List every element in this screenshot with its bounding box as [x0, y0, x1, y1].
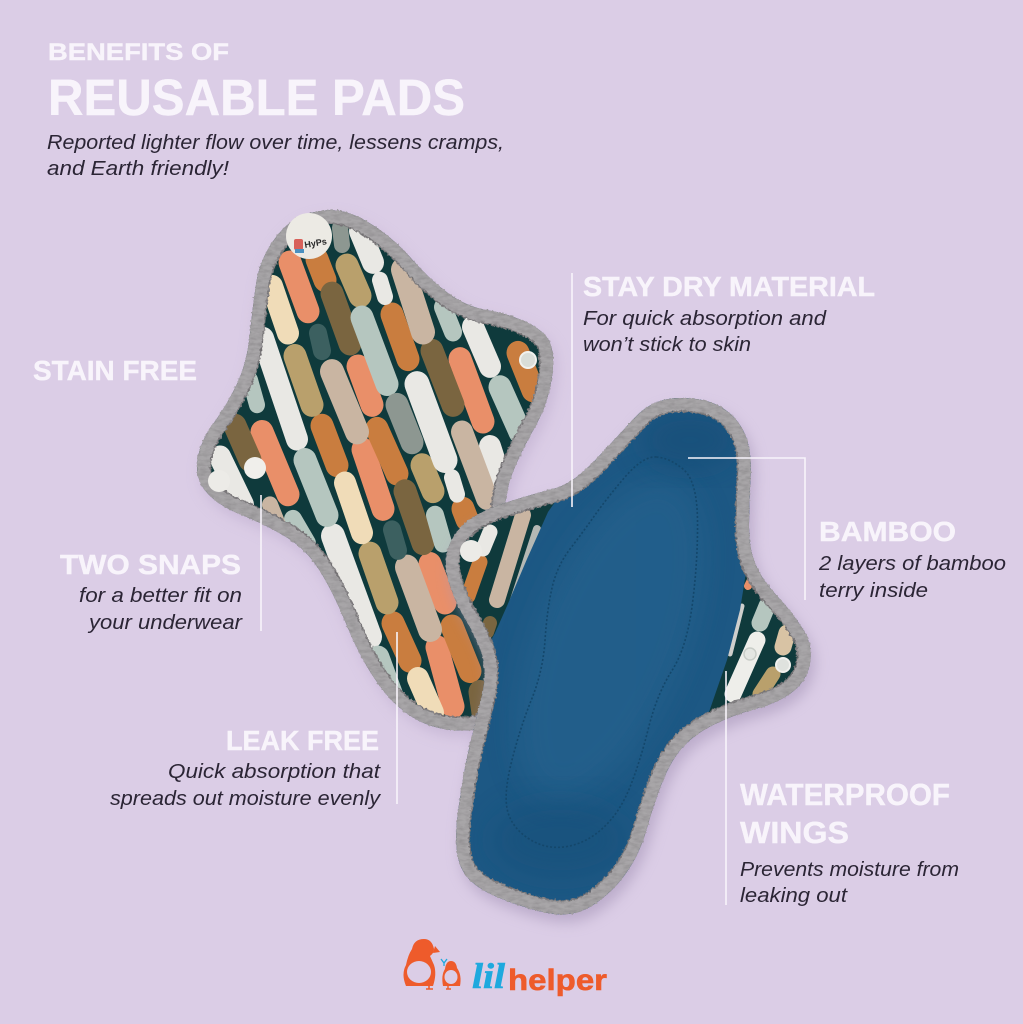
blue fabric	[456, 398, 751, 914]
callout: leak free: spreads out moisture evenly	[110, 788, 381, 810]
callout: bamboo	[688, 458, 1006, 602]
wing print stripes	[468, 515, 787, 694]
callout: leak free: LEAK FREE	[226, 725, 379, 756]
HyPs label	[286, 213, 332, 259]
callout: stay dry material: For quick absorption and	[583, 308, 827, 330]
pad body	[446, 398, 811, 914]
solid under-band of border	[446, 398, 811, 914]
patterned pad body	[197, 210, 553, 730]
snap	[208, 470, 230, 492]
subtitle second line: and Earth friendly!	[47, 158, 229, 180]
snap	[244, 457, 266, 479]
callout: waterproof wings: Prevents moisture from	[740, 859, 959, 881]
snap	[744, 648, 756, 660]
brush stripes pattern	[220, 228, 533, 713]
callout: waterproof wings: WATERPROOF	[740, 777, 950, 812]
callout: leak free: Quick absorption that	[168, 761, 382, 783]
pad shadow	[201, 217, 557, 738]
title block	[47, 39, 504, 180]
panel: blue pad (top view)	[430, 385, 830, 930]
callout: leak free	[110, 632, 397, 810]
callout: two snaps: your underwear	[87, 612, 243, 634]
snap	[776, 658, 790, 672]
callout: two snaps	[60, 495, 261, 634]
title: benefits of: BENEFITS OF	[48, 39, 229, 66]
icon: large chick	[404, 939, 440, 989]
title: reusable pads: REUSABLE PADS	[48, 69, 465, 126]
callout: stay dry material: won’t stick to skin	[583, 334, 751, 356]
panel: patterned pad (back view)	[196, 209, 558, 739]
callout: waterproof wings: WINGS	[740, 815, 849, 850]
fabric shading	[477, 454, 743, 826]
solid under-band of border	[197, 210, 553, 731]
stitched core outline	[506, 457, 698, 847]
callout: bamboo: terry inside	[819, 580, 928, 602]
HyPs label: HyPs	[304, 236, 328, 250]
callout: stay dry material	[572, 271, 875, 507]
grey fleece border	[446, 398, 811, 914]
callout: bamboo: 2 layers of bamboo	[818, 553, 1006, 575]
grey fleece border	[197, 210, 553, 731]
callout: waterproof wings	[726, 671, 959, 907]
logo: lil helper	[404, 939, 607, 997]
callout: bamboo: BAMBOO	[819, 516, 956, 547]
snap	[460, 540, 482, 562]
wordmark: lil: lil	[472, 956, 505, 996]
callout: stay dry material: STAY DRY MATERIAL	[583, 271, 875, 302]
wordmark: helper: helper	[508, 964, 607, 997]
callout: two snaps: for a better fit on	[79, 585, 242, 607]
callout: waterproof wings: leaking out	[740, 885, 849, 907]
pad shadow	[450, 406, 815, 922]
snap	[520, 352, 536, 368]
callout: stain free: STAIN FREE	[33, 355, 197, 386]
icon: small chick	[441, 959, 461, 989]
subtitle: Reported lighter flow over time, lessens cramps,	[47, 132, 504, 154]
callout: two snaps: TWO SNAPS	[60, 549, 241, 580]
